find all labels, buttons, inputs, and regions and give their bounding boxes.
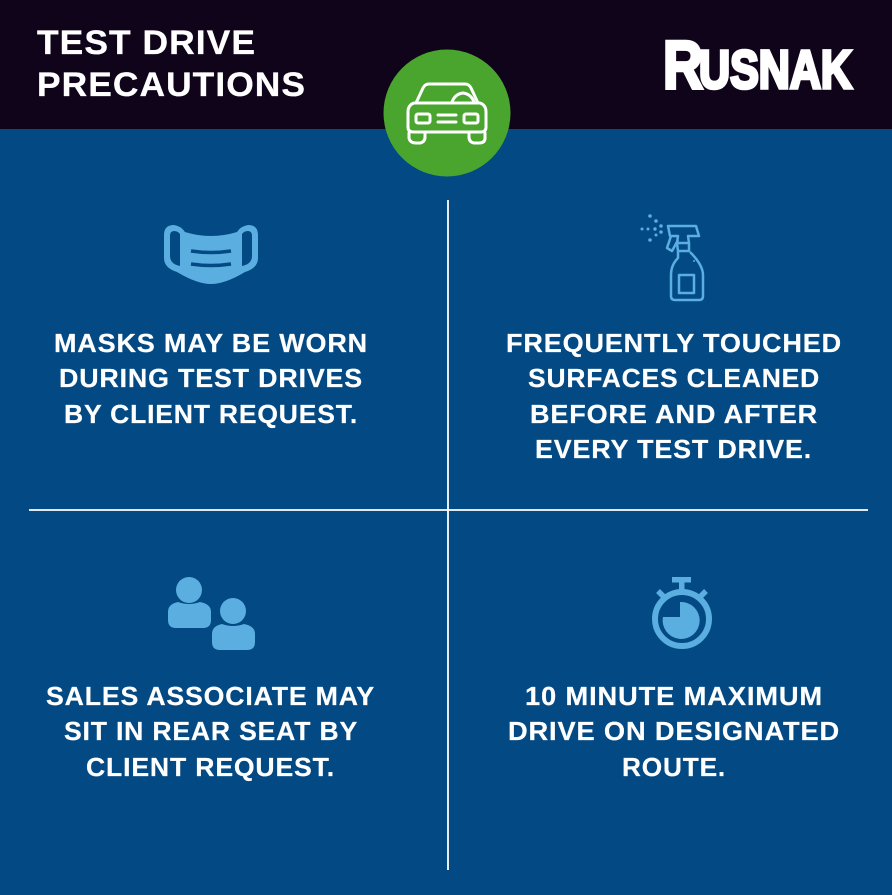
dividers	[29, 200, 868, 870]
text: sales associate	[46, 681, 375, 782]
panel: time limit	[508, 577, 840, 782]
logo: Rusnak: USNAK	[699, 40, 852, 100]
logo: Rusnak	[663, 27, 852, 103]
title: PRECAUTIONS	[37, 66, 306, 104]
text: sales associate: SALES ASSOCIATE MAY	[46, 681, 375, 711]
text: time limit: 10 MINUTE MAXIMUM	[525, 681, 823, 711]
text: surfaces: SURFACES CLEANED	[528, 363, 820, 393]
text: time limit	[508, 681, 840, 782]
text: time limit: ROUTE.	[622, 752, 726, 782]
panel: masks	[54, 225, 368, 429]
text: masks	[54, 328, 368, 429]
text: time limit: DRIVE ON DESIGNATED	[508, 716, 840, 746]
panel: sales associate	[46, 577, 375, 782]
text: surfaces: FREQUENTLY TOUCHED	[506, 328, 842, 358]
text: sales associate: SIT IN REAR SEAT BY	[64, 716, 358, 746]
logo: Rusnak: R	[663, 27, 703, 103]
header band	[0, 0, 892, 129]
text: masks: BY CLIENT REQUEST.	[64, 399, 358, 429]
text: surfaces: BEFORE AND AFTER	[530, 399, 818, 429]
text: sales associate: CLIENT REQUEST.	[86, 752, 335, 782]
panel: surfaces	[506, 214, 842, 464]
title: TEST DRIVE	[37, 24, 256, 62]
icon: face mask	[164, 225, 258, 284]
text: surfaces: EVERY TEST DRIVE.	[535, 434, 812, 464]
text: masks: DURING TEST DRIVES	[59, 363, 363, 393]
icon: car in green circle	[384, 50, 510, 176]
icon: two people	[168, 577, 255, 650]
text: masks: MASKS MAY BE WORN	[54, 328, 368, 358]
title	[37, 24, 306, 104]
text: surfaces	[506, 328, 842, 464]
icon: stopwatch	[655, 577, 709, 646]
icon: spray bottle	[640, 214, 703, 300]
